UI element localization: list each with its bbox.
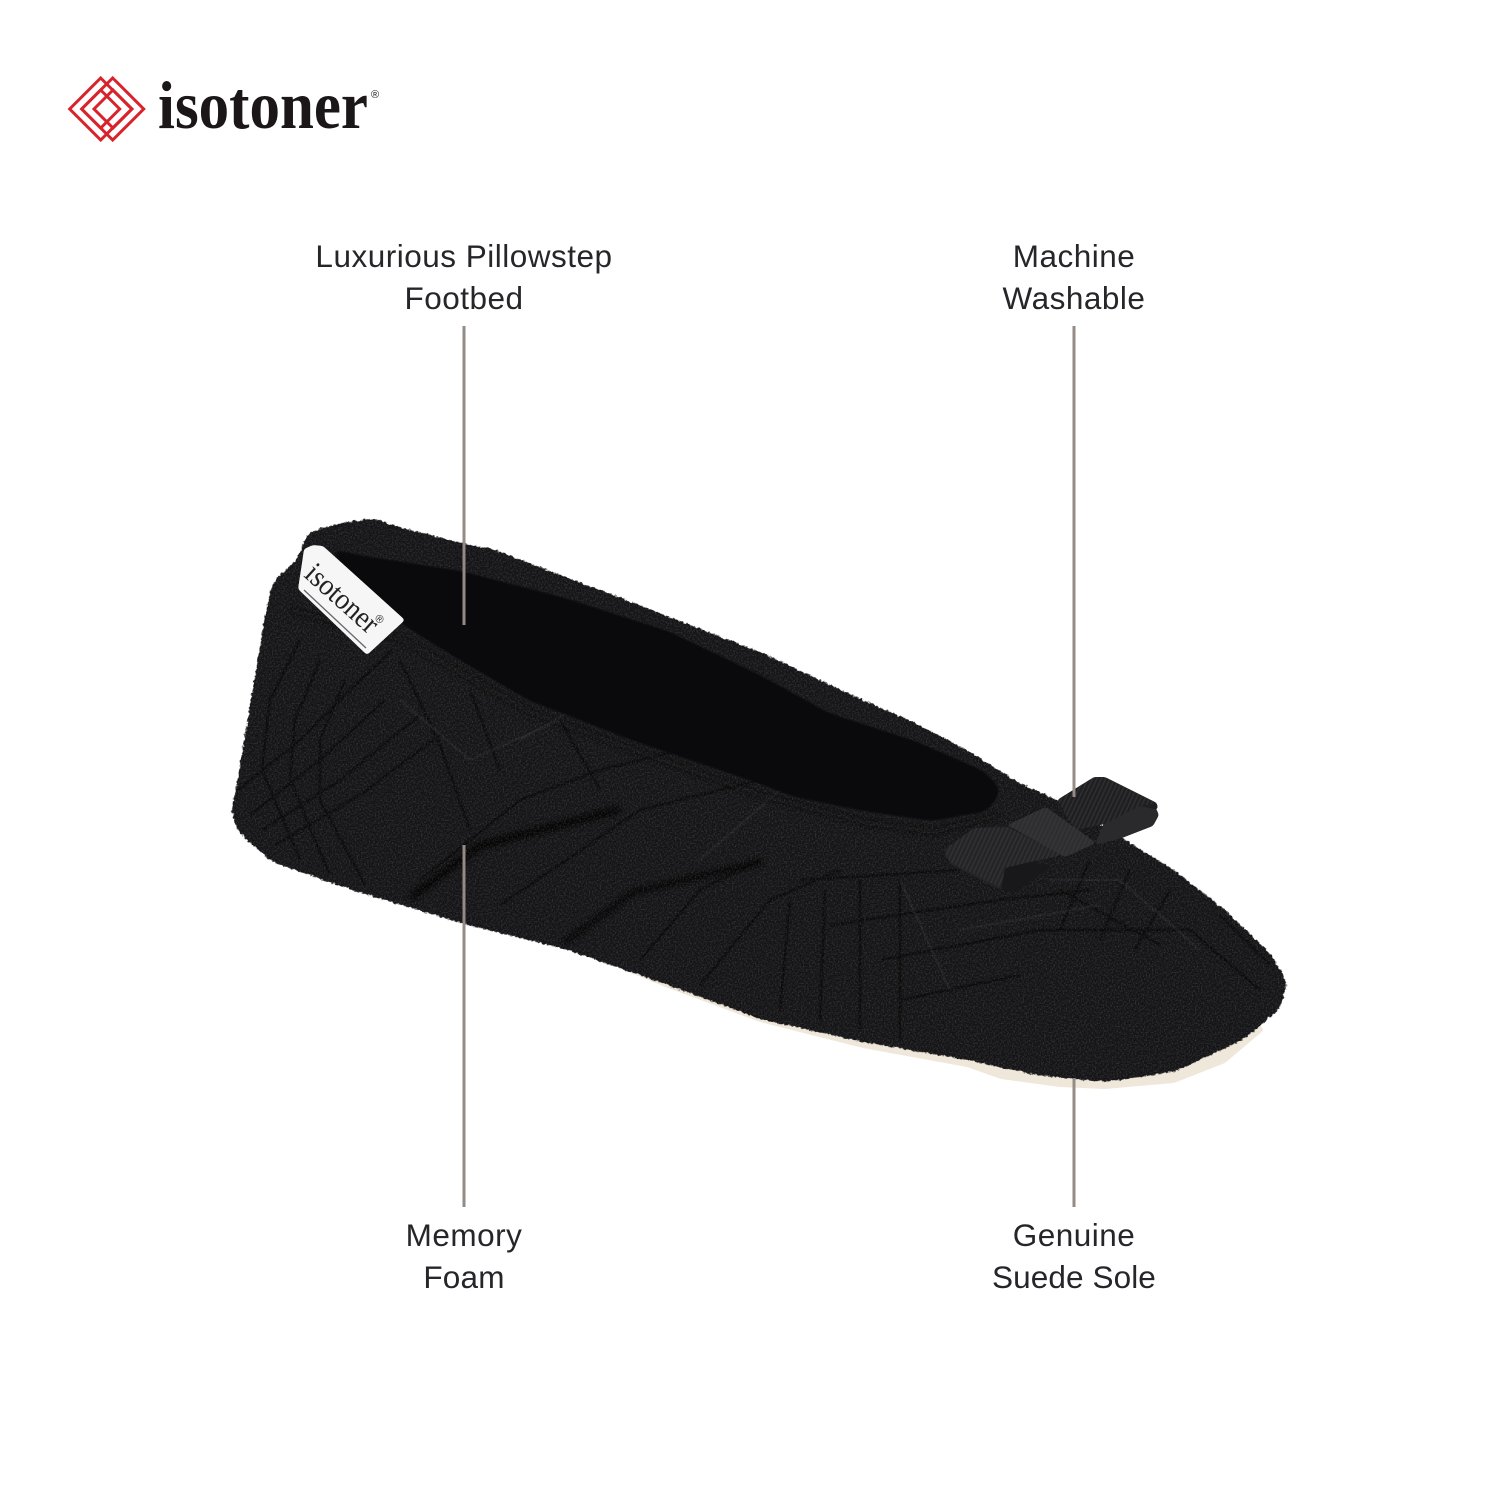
front loop inside bbox=[1001, 862, 1053, 893]
slipper inner cavity bbox=[323, 545, 1002, 821]
leader line bbox=[1072, 1078, 1076, 1207]
logo wordmark: isotoner bbox=[158, 67, 368, 143]
callout: Memory Foam bbox=[406, 845, 522, 1295]
back loop inside bbox=[1095, 806, 1159, 845]
callout: Luxurious Pillowstep Footbed bbox=[315, 238, 613, 625]
heading line two: Suede Sole bbox=[992, 1259, 1156, 1295]
back loop bbox=[1057, 777, 1158, 830]
heading line two: Washable bbox=[1003, 280, 1145, 316]
callout: Machine Washable bbox=[1003, 238, 1145, 797]
tag fold bbox=[304, 590, 366, 648]
icon: red nested diamonds bbox=[70, 78, 144, 140]
tag registered mark: ® bbox=[372, 612, 386, 627]
slipper body bbox=[220, 500, 1300, 1100]
cream suede sole bbox=[600, 960, 1264, 1089]
quilted texture lines bbox=[238, 640, 1270, 1040]
leader line bbox=[462, 845, 466, 1207]
pile noise bbox=[220, 500, 1300, 1100]
heading: Machine bbox=[1013, 238, 1135, 274]
brand tag bbox=[298, 545, 405, 655]
callout: Genuine Suede Sole bbox=[992, 1078, 1156, 1295]
white tag bbox=[298, 545, 405, 655]
registered mark: ® bbox=[371, 89, 379, 101]
logo: isotoner bbox=[70, 67, 379, 143]
leader line bbox=[1072, 326, 1076, 797]
rim shadow bbox=[402, 642, 775, 801]
heading: Memory bbox=[406, 1217, 522, 1253]
wrinkle creases bbox=[413, 810, 760, 942]
slipper product image bbox=[220, 500, 1300, 1100]
heading: Luxurious Pillowstep bbox=[315, 238, 613, 274]
center knot bbox=[1007, 807, 1096, 857]
heading line two: Foam bbox=[423, 1259, 505, 1295]
ribbon bow bbox=[944, 777, 1159, 893]
heading: Genuine bbox=[1013, 1217, 1135, 1253]
leader line bbox=[462, 326, 466, 625]
tag text: isotoner bbox=[298, 557, 386, 640]
front loop bbox=[944, 827, 1063, 890]
heading line two: Footbed bbox=[404, 280, 524, 316]
